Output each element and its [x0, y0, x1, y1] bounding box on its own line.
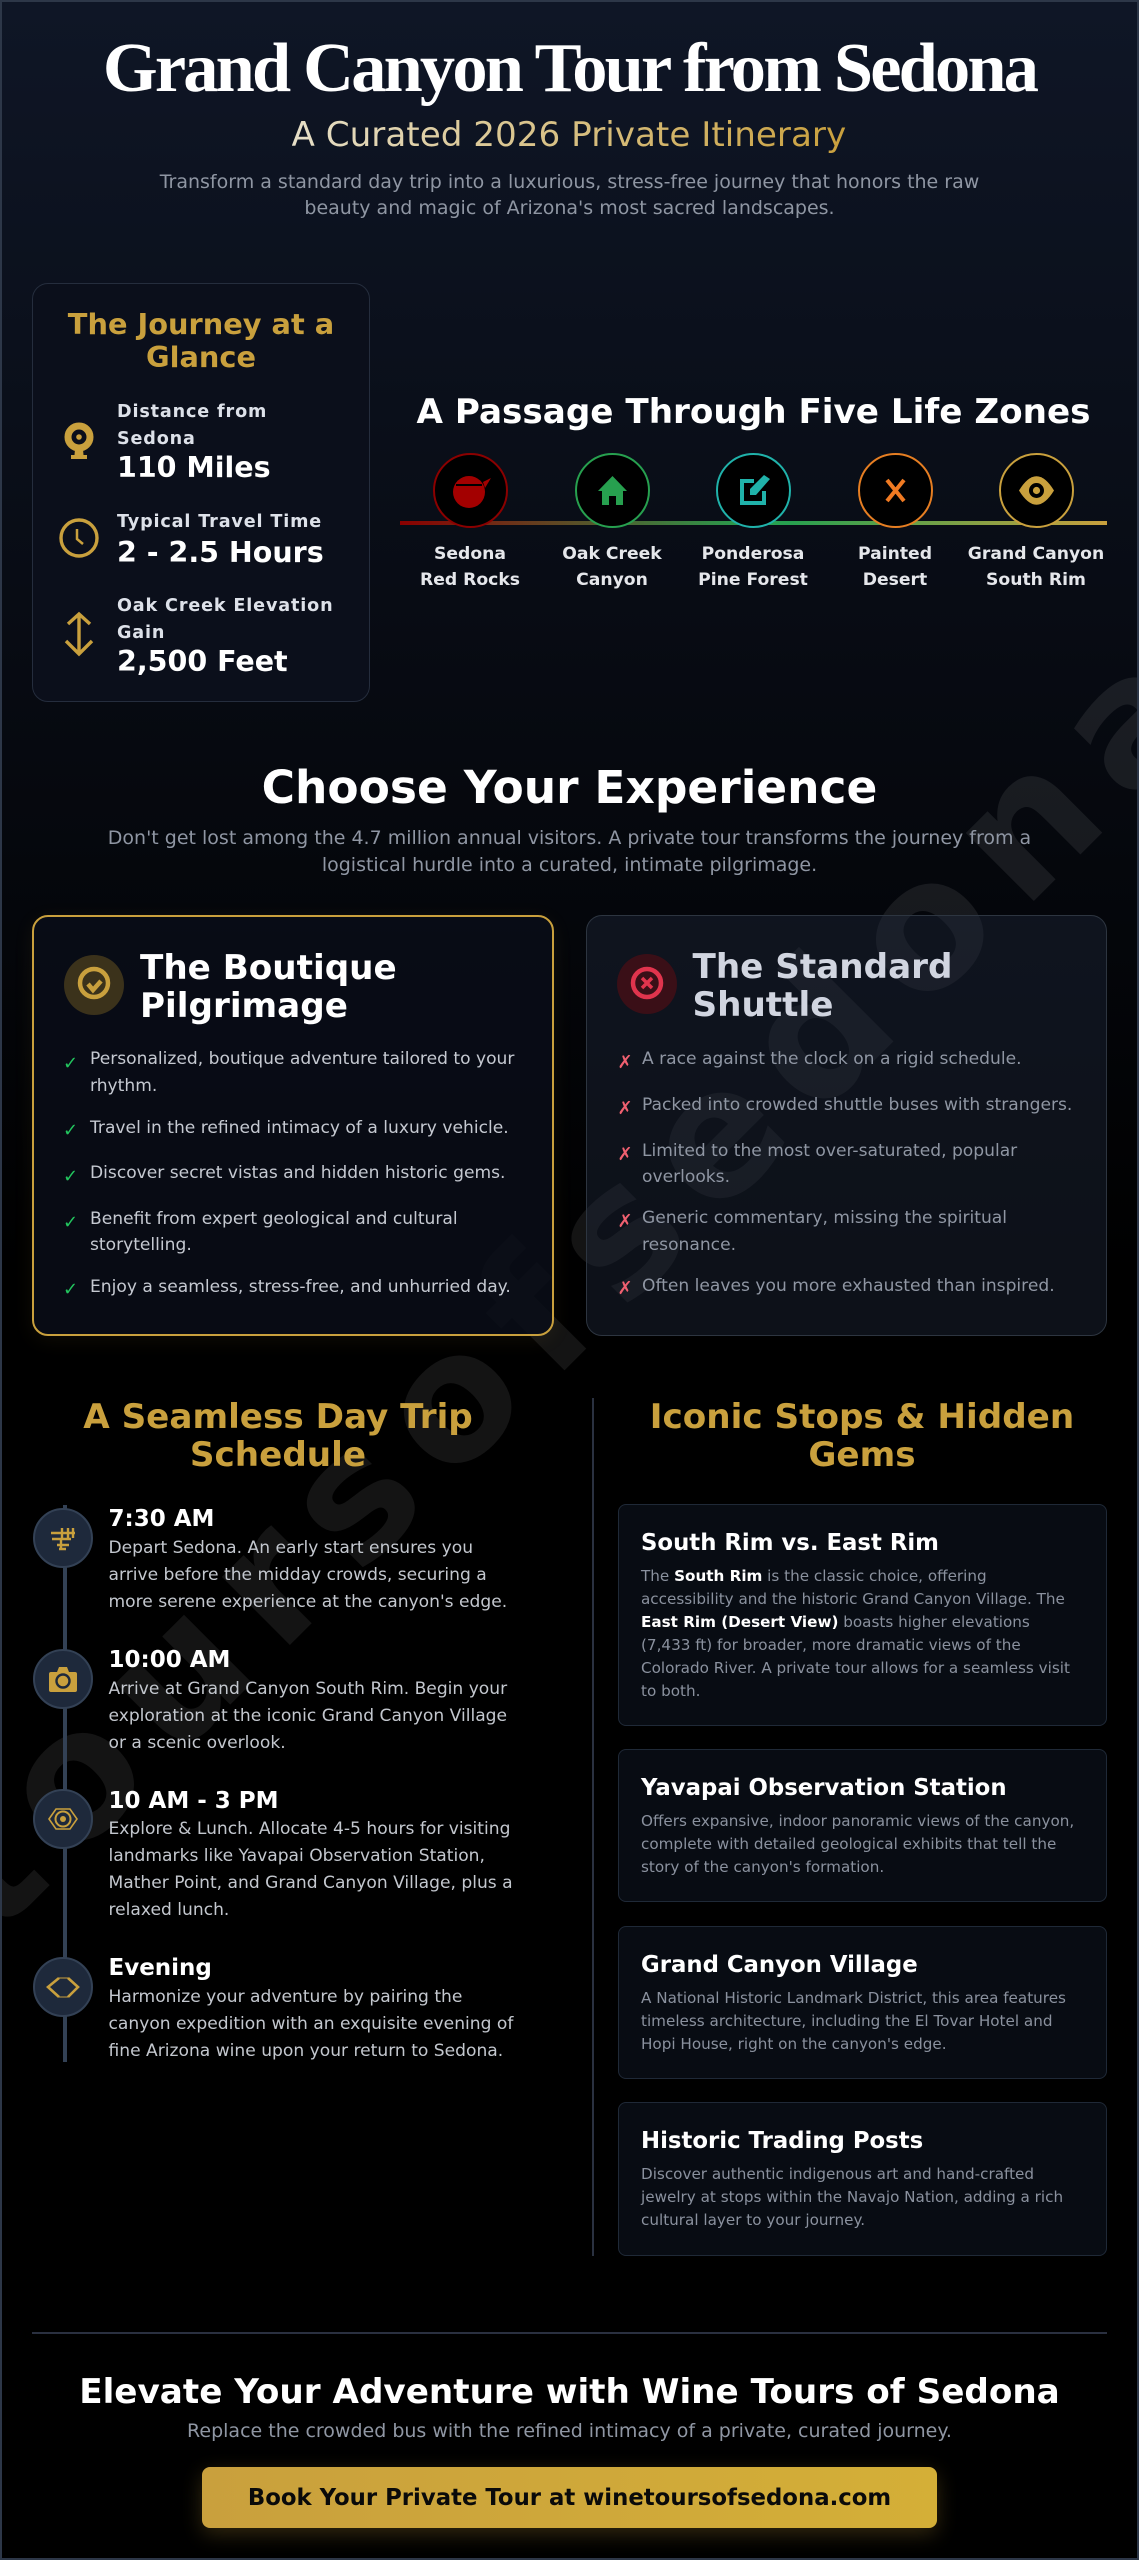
drawback 4: Generic commentary, missing the spiritual [642, 1208, 1007, 1228]
card text: cultural layer to your journey. [641, 2211, 865, 2229]
elevation label [117, 596, 333, 643]
zone label: Sedona: Sedona [434, 544, 506, 564]
description: more serene experience at the canyon's edge. [108, 1592, 507, 1612]
card text [641, 1810, 1074, 1879]
panel heading [140, 948, 397, 1026]
elevation label: Oak Creek Elevation [117, 596, 333, 616]
drawback 2: Packed into crowded shuttle buses with strangers. [642, 1095, 1072, 1115]
zone icon: Sedona [432, 453, 508, 528]
card title: Grand Canyon Village [641, 1952, 918, 1978]
card text: The South Rim is the classic choice, offering [641, 1567, 987, 1585]
intro text: beauty and magic of Arizona's most sacred landscapes. [304, 197, 835, 219]
card text: Colorado River. A private tour allows for a seamless visit [641, 1659, 1070, 1677]
cross: ✗ [618, 1098, 633, 1118]
call to action button: Book Your Private Tour at winetoursofsedona.com [248, 2485, 891, 2511]
description: landmarks like Yavapai Observation Station, [108, 1846, 485, 1866]
icon: clock [59, 518, 99, 558]
description [108, 1819, 513, 1920]
card: south rim vs east rim [618, 1504, 1106, 1726]
subtitle: A Curated 2026 Private Itinerary [292, 115, 846, 155]
distance label: Distance from [117, 402, 267, 422]
card title: South Rim vs. East Rim [641, 1530, 939, 1556]
benefit 4: storytelling. [90, 1235, 192, 1255]
zone icon: Grand Canyon [998, 453, 1074, 528]
zone label: Ponderosa: Pine Forest [698, 570, 808, 590]
card title: Yavapai Observation Station [641, 1775, 1007, 1801]
cross: ✗ [618, 1052, 633, 1072]
zone icon: Oak Creek [574, 453, 650, 528]
call to action button [202, 2467, 937, 2528]
zone label: Painted Desert [858, 544, 932, 590]
panel heading: The Standard [692, 947, 952, 987]
check: ✓ [63, 1166, 78, 1186]
card: yavapai observation station [618, 1749, 1106, 1902]
travel time label: Typical Travel Time [117, 512, 322, 532]
benefit 1: rhythm. [90, 1076, 157, 1096]
header [103, 28, 1038, 219]
zone label: Painted Desert: Desert [863, 570, 927, 590]
description: Harmonize your adventure by pairing the [108, 1987, 462, 2007]
description: exploration at the iconic Grand Canyon Village [108, 1706, 507, 1726]
card text: story of the canyon's formation. [641, 1858, 884, 1876]
benefit 5: Enjoy a seamless, stress-free, and unhurried day. [90, 1277, 511, 1297]
column divider [592, 1398, 594, 2256]
card text: jewelry at stops within the Navajo Nation, adding a rich [641, 2188, 1063, 2206]
panel heading: Glance [146, 340, 256, 374]
description [108, 1679, 508, 1753]
benefit 1 [90, 1049, 514, 1096]
zone icon: Ponderosa [716, 453, 790, 528]
panel heading [692, 947, 952, 1025]
section: iconic stops heading: Iconic Stops & Hidden [650, 1397, 1074, 1437]
card text: Discover authentic indigenous art and hand-crafted [641, 2165, 1034, 2183]
footer rule [32, 2332, 1107, 2334]
zone label: Grand Canyon: South Rim [986, 570, 1086, 590]
schedule entry: 10:00 AM [108, 1647, 508, 1753]
schedule entry: 7:30 AM [108, 1506, 507, 1612]
title: Grand Canyon Tour from Sedona [103, 28, 1036, 106]
card text: (7,433 ft) for broader, more dramatic views of the [641, 1636, 1021, 1654]
panel heading: The Journey at a [68, 307, 334, 341]
section description [108, 827, 1031, 876]
card text: to both. [641, 1682, 700, 1700]
card: grand canyon village [618, 1926, 1106, 2079]
zone label: Oak Creek: Oak Creek [562, 544, 662, 564]
intro text [160, 171, 979, 219]
section: iconic stops heading [650, 1397, 1074, 1475]
time: Evening [108, 1955, 212, 1981]
icon: location marker [64, 422, 94, 459]
card: historic trading posts [618, 2102, 1106, 2256]
zones heading: A Passage Through Five Life Zones [416, 392, 1091, 432]
schedule entry: 10 AM - 3 PM [108, 1788, 513, 1920]
card text [641, 1565, 1070, 1703]
schedule heading: Schedule [190, 1435, 366, 1475]
panel heading: Pilgrimage [140, 986, 348, 1026]
panel: five life zones [400, 392, 1107, 590]
icon: up and down arrow [64, 612, 94, 656]
timeline node: 10 AM - 3 PM [33, 1789, 93, 1849]
description: Arrive at Grand Canyon South Rim. Begin your [108, 1679, 507, 1699]
icon: check badge [64, 955, 124, 1015]
description: Explore & Lunch. Allocate 4-5 hours for visiting [108, 1819, 510, 1839]
schedule entry: Evening [108, 1955, 514, 2061]
drawback 3 [642, 1141, 1018, 1187]
drawback 1: A race against the clock on a rigid schedule. [642, 1049, 1022, 1069]
description: canyon expedition with an exquisite evening of [108, 2014, 513, 2034]
icon: cross badge [617, 954, 677, 1014]
card text: Hopi House, right on the canyon's edge. [641, 2035, 947, 2053]
time: 10 AM - 3 PM [108, 1788, 279, 1814]
benefit 2: Travel in the refined intimacy of a luxury vehicle. [90, 1118, 509, 1138]
description: Mather Point, and Grand Canyon Village, plus a [108, 1873, 513, 1893]
description: relaxed lunch. [108, 1900, 229, 1920]
zone label: Grand Canyon [968, 544, 1104, 590]
card text: accessibility and the historic Grand Canyon Village. The [641, 1590, 1065, 1608]
section heading: Choose Your Experience [262, 761, 877, 814]
benefit 3: Discover secret vistas and hidden historic gems. [90, 1163, 505, 1183]
section: choose your experience [108, 761, 1031, 876]
panel: the boutique pilgrimage [32, 915, 554, 1336]
card text: timeless architecture, including the El Tovar Hotel and [641, 2012, 1052, 2030]
section: day trip schedule [33, 1397, 514, 2062]
zone label: Sedona: Red Rocks [420, 570, 520, 590]
cross: ✗ [618, 1210, 633, 1232]
panel heading: Shuttle [692, 985, 833, 1025]
description: arrive before the midday crowds, securing a [108, 1565, 487, 1585]
description: fine Arizona wine upon your return to Sedona. [108, 2041, 503, 2061]
stat: travel time [59, 512, 324, 569]
footer call to action [32, 2332, 1107, 2532]
check: ✓ [63, 1052, 78, 1074]
drawback 4: resonance. [642, 1235, 736, 1255]
stat: distance [64, 402, 271, 484]
panel heading [68, 307, 334, 374]
zone label: Oak Creek [562, 544, 662, 590]
schedule heading: A Seamless Day Trip [83, 1397, 473, 1437]
card text: East Rim (Desert View) boasts higher elevations [641, 1613, 1030, 1631]
cross: ✗ [618, 1144, 633, 1164]
card text [641, 1987, 1066, 2056]
drawback 5: Often leaves you more exhausted than inspired. [642, 1276, 1055, 1296]
panel: the journey at a glance [32, 283, 370, 702]
zones gradient line [400, 521, 1107, 525]
timeline node: Evening [33, 1957, 93, 2017]
timeline node: 10:00 AM [33, 1649, 93, 1709]
drawback 3: Limited to the most over-saturated, popular [642, 1141, 1017, 1161]
schedule heading [83, 1397, 473, 1475]
stat: elevation [64, 596, 333, 678]
cross: ✗ [618, 1278, 633, 1298]
check: ✓ [63, 1120, 78, 1140]
distance label [117, 402, 267, 449]
zone icon: Painted Desert [858, 453, 932, 528]
check: ✓ [63, 1278, 78, 1300]
card text [641, 2163, 1063, 2232]
timeline line [62, 1505, 66, 2062]
intro text: Transform a standard day trip into a luxurious, stress-free journey that honors the raw [160, 171, 979, 193]
footer text: Replace the crowded bus with the refined intimacy of a private, curated journey. [187, 2420, 952, 2442]
card text: complete with detailed geological exhibits that tell the [641, 1835, 1056, 1853]
section description: Don't get lost among the 4.7 million annual visitors. A private tour transforms the journey from a [108, 827, 1031, 849]
section description: logistical hurdle into a curated, intimate pilgrimage. [322, 854, 817, 876]
zone label: Sedona [420, 544, 520, 590]
description [108, 1987, 514, 2061]
drawbacks list [618, 1049, 1072, 1298]
elevation value: 2,500 Feet [117, 645, 288, 678]
panel heading: The Boutique [140, 948, 397, 988]
footer heading: Elevate Your Adventure with Wine Tours of Sedona [79, 2372, 1060, 2412]
benefit 1: Personalized, boutique adventure tailored to your [90, 1049, 514, 1069]
zone label: Ponderosa [698, 544, 808, 590]
section: iconic stops heading: Gems [808, 1435, 916, 1475]
panel: the standard shuttle [586, 915, 1107, 1336]
description: or a scenic overlook. [108, 1733, 286, 1753]
zone label: Ponderosa: Ponderosa [702, 544, 804, 564]
card title: Historic Trading Posts [641, 2128, 923, 2154]
description [108, 1538, 507, 1612]
description: Depart Sedona. An early start ensures you [108, 1538, 473, 1558]
zone label: Oak Creek: Canyon [576, 570, 648, 590]
elevation label: Gain [117, 623, 165, 643]
benefit 4: Benefit from expert geological and cultural [90, 1209, 458, 1229]
travel time value: 2 - 2.5 Hours [117, 536, 324, 569]
drawback 4 [642, 1208, 1007, 1255]
drawback 3: overlooks. [642, 1167, 730, 1187]
timeline node: 7:30 AM [33, 1508, 93, 1568]
benefits list [63, 1049, 514, 1300]
distance value: 110 Miles [117, 451, 271, 484]
distance label: Sedona [117, 429, 196, 449]
benefit 4 [90, 1209, 458, 1255]
zone label: Grand Canyon: Grand Canyon [968, 544, 1104, 564]
time: 7:30 AM [108, 1506, 214, 1532]
zone label: Painted Desert: Painted [858, 544, 932, 564]
check: ✓ [63, 1212, 78, 1232]
card text: A National Historic Landmark District, this area features [641, 1989, 1066, 2007]
time: 10:00 AM [108, 1647, 230, 1673]
card text: Offers expansive, indoor panoramic views of the canyon, [641, 1812, 1074, 1830]
